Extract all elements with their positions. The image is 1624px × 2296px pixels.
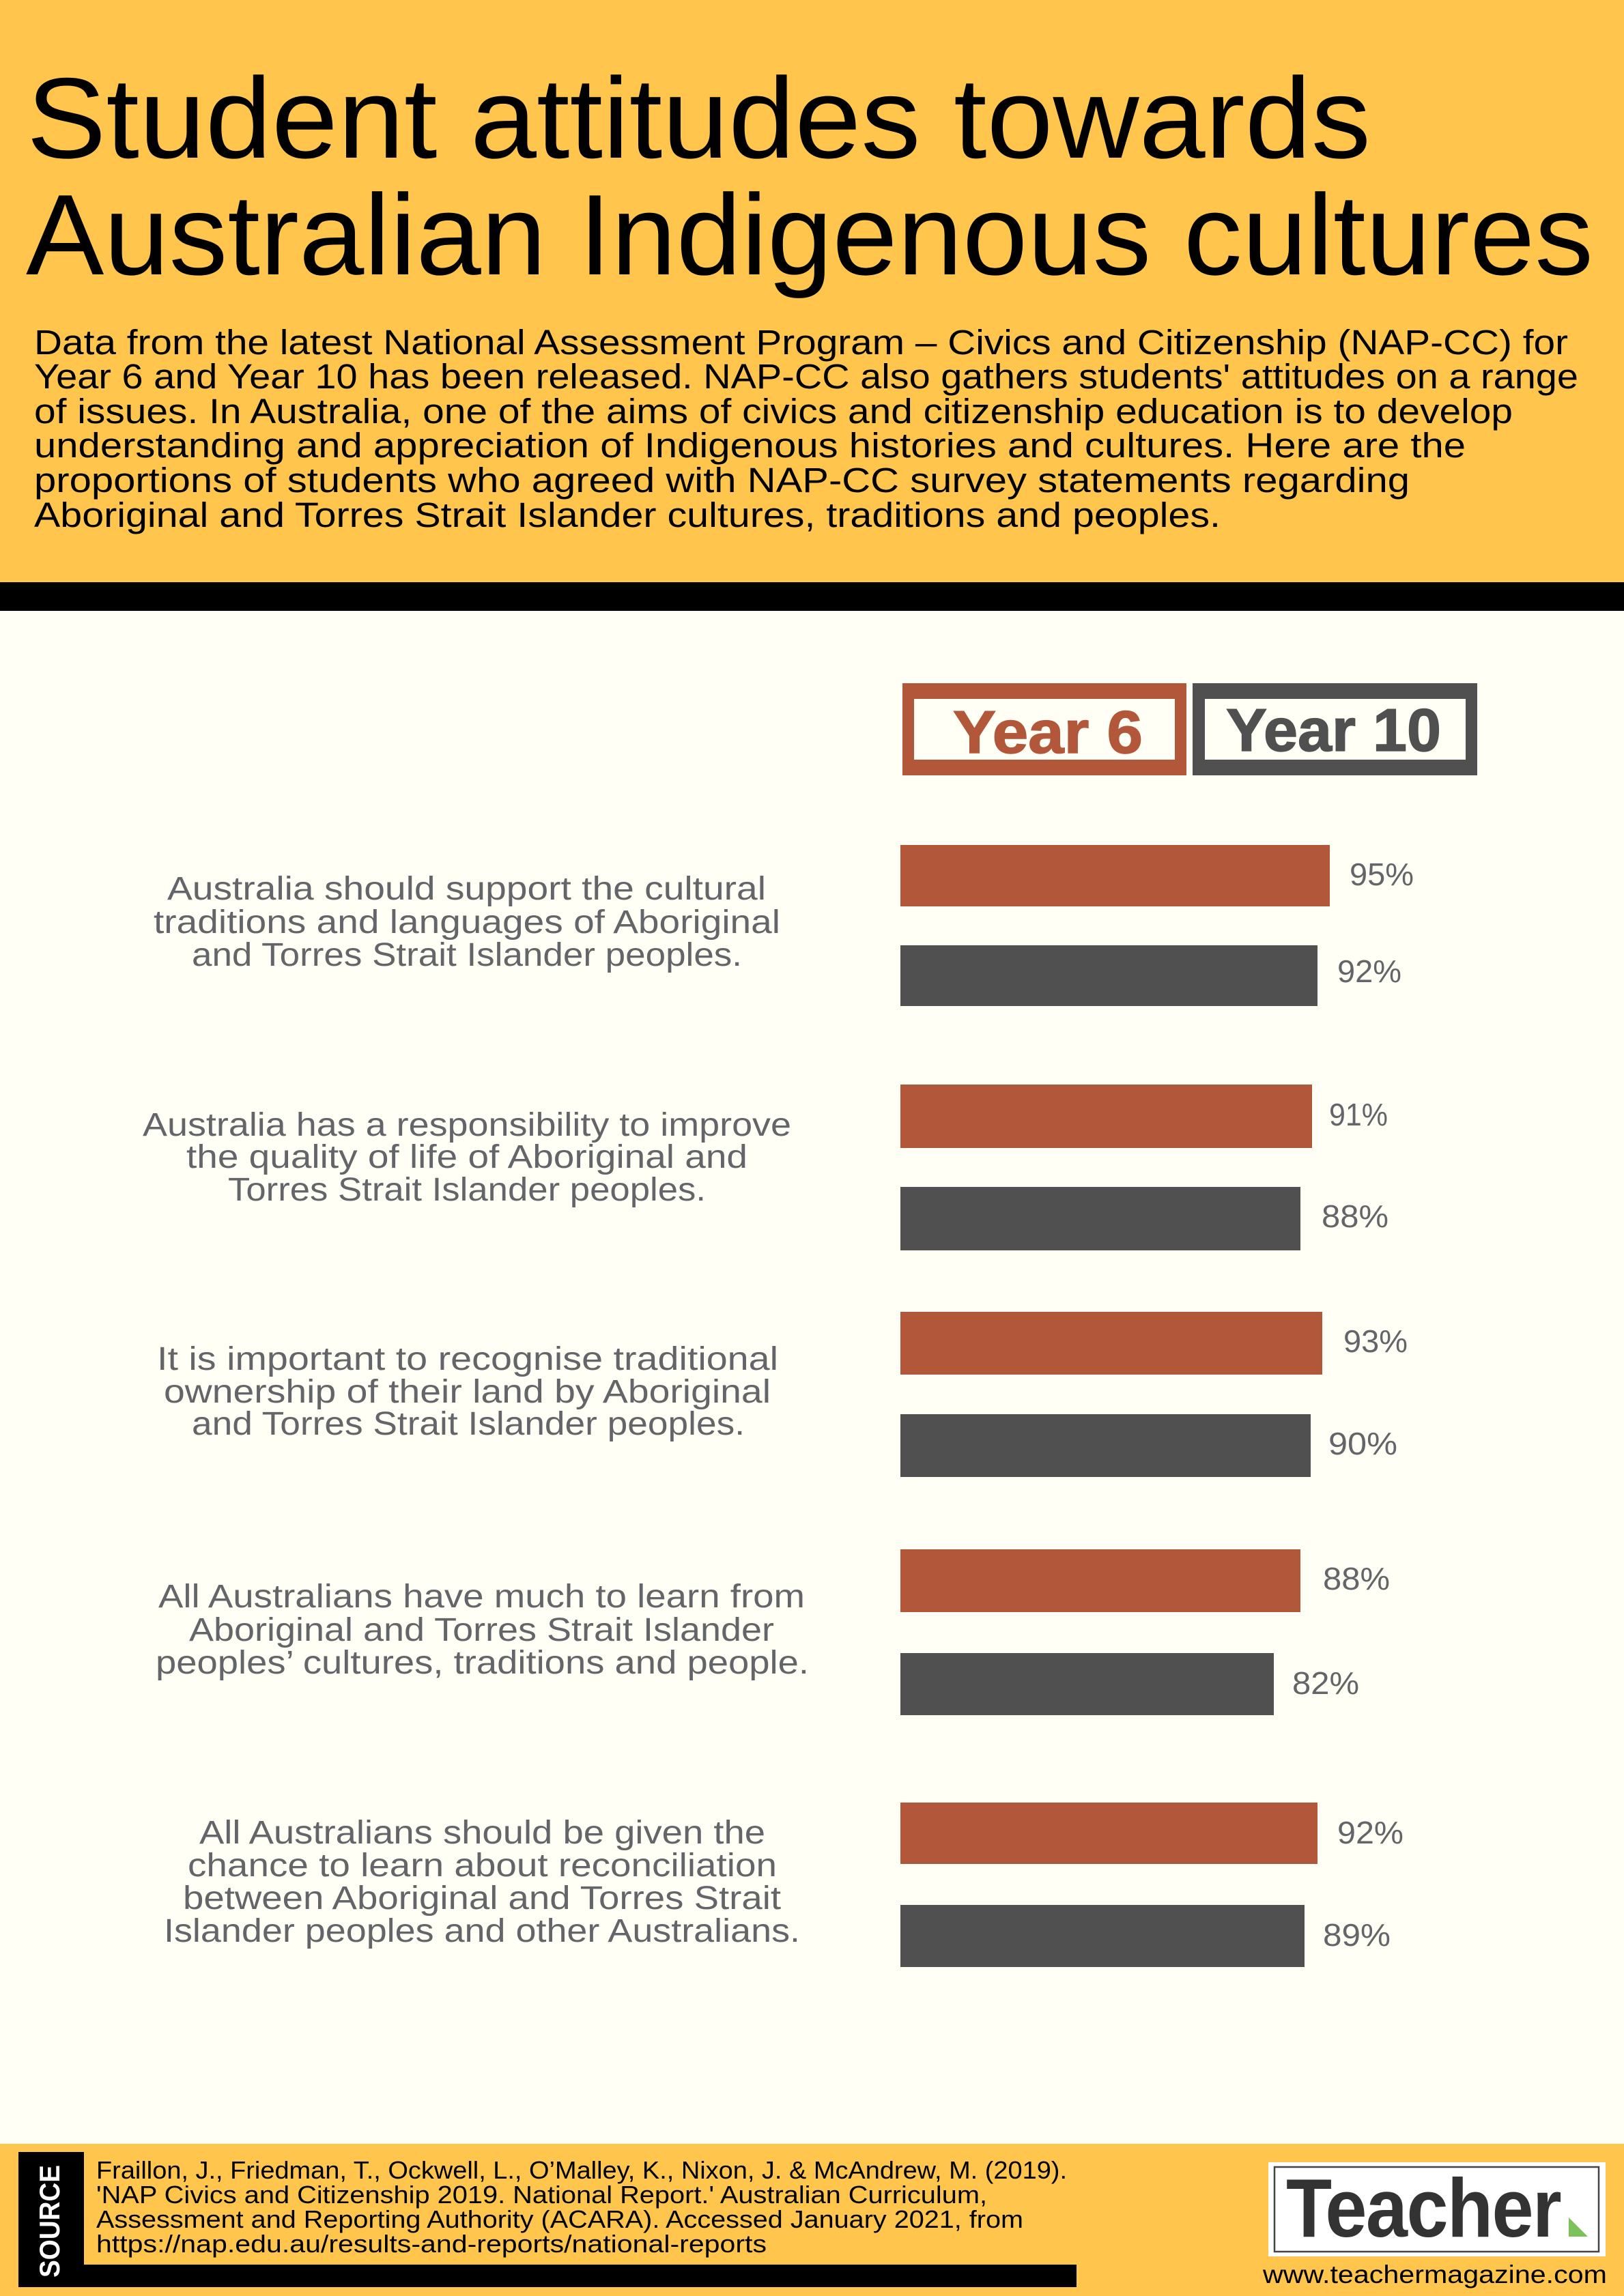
source frame: SOURCE [33, 2165, 66, 2278]
bar chart row 2 [900, 1085, 1388, 1250]
statement 3: ownership of their land by Aboriginal [164, 1374, 771, 1410]
bar chart row 1: 95% [1350, 857, 1414, 892]
bar chart row 4: 82% [1292, 1665, 1359, 1701]
statement 2 [143, 1107, 791, 1208]
intro text block: of issues. In Australia, one of the aims of civics and citizenship education is to develop [34, 392, 1513, 431]
statement 3 [157, 1341, 778, 1442]
intro text block: Data from the latest National Assessment Program – Civics and Citizenship (NAP-CC) for [34, 323, 1568, 362]
statement 4: All Australians have much to learn from [158, 1579, 805, 1615]
bar chart row 2: 91% [1329, 1097, 1388, 1132]
statement 5: between Aboriginal and Torres Strait [183, 1880, 781, 1917]
bar chart row 4 [900, 1549, 1390, 1715]
statement 1: traditions and languages of Aboriginal [154, 904, 780, 941]
bar chart row 5 [900, 1803, 1404, 1967]
statement 2: Torres Strait Islander peoples. [228, 1172, 706, 1208]
intro text block: Year 6 and Year 10 has been released. NAP-CC also gathers students' attitudes on a range [34, 357, 1578, 396]
panel: footer [0, 2144, 1624, 2296]
statement 3: It is important to recognise traditional [157, 1341, 778, 1377]
statement 2: Australia has a responsibility to improve [143, 1107, 791, 1143]
bar chart row 5: 89% [1323, 1917, 1391, 1953]
title: Student attitudes towards [27, 54, 1371, 182]
legend: Year 10 [1193, 683, 1477, 775]
statement 4: peoples’ cultures, traditions and people. [156, 1645, 809, 1681]
bar chart row 1: 92% [1337, 953, 1401, 989]
bar chart row 3: 93% [1343, 1323, 1408, 1359]
statement 4 [156, 1579, 809, 1681]
statement 1: and Torres Strait Islander peoples. [192, 937, 742, 973]
statement 1 [154, 871, 780, 973]
statement 5 [164, 1815, 800, 1949]
statement 5: All Australians should be given the [199, 1815, 765, 1851]
statement 5: chance to learn about reconciliation [188, 1848, 777, 1884]
legend: Year 6 [902, 683, 1186, 775]
statement 3: and Torres Strait Islander peoples. [192, 1406, 745, 1442]
statement 4: Aboriginal and Torres Strait Islander [189, 1612, 774, 1648]
source citation: Assessment and Reporting Authority (ACARA). Accessed January 2021, from [96, 2205, 1023, 2233]
intro text block: Aboriginal and Torres Strait Islander cultures, traditions and peoples. [34, 496, 1221, 534]
source citation: https://nap.edu.au/results-and-reports/national-reports [96, 2230, 767, 2258]
title: Australian Indigenous cultures [26, 171, 1593, 299]
bar chart row 4: 88% [1323, 1561, 1390, 1596]
logo: Teacher: Teacher [1286, 2162, 1561, 2254]
legend: Year 10: Year 10 [1226, 696, 1441, 764]
intro text block [34, 323, 1578, 534]
bar chart row 5: 92% [1337, 1815, 1404, 1850]
website url: www.teachermagazine.com [1262, 2261, 1607, 2288]
panel: header [0, 0, 1624, 611]
source citation [96, 2156, 1067, 2258]
intro text block: understanding and appreciation of Indigenous histories and cultures. Here are the [34, 426, 1466, 465]
bar chart row 1 [900, 845, 1414, 1006]
statement 1: Australia should support the cultural [167, 871, 766, 907]
source citation: 'NAP Civics and Citizenship 2019. National Report.' Australian Curriculum, [96, 2181, 987, 2209]
legend: Year 6: Year 6 [953, 698, 1143, 766]
source frame [18, 2152, 1077, 2287]
bar chart row 3 [900, 1312, 1408, 1477]
bar chart row 2: 88% [1322, 1199, 1388, 1234]
statement 2: the quality of life of Aboriginal and [186, 1139, 747, 1175]
intro text block: proportions of students who agreed with NAP-CC survey statements regarding [34, 461, 1410, 500]
source citation: Fraillon, J., Friedman, T., Ockwell, L., O’Malley, K., Nixon, J. & McAndrew, M. (2019). [96, 2156, 1067, 2184]
bar chart row 3: 90% [1328, 1426, 1397, 1461]
statement 5: Islander peoples and other Australians. [164, 1913, 800, 1949]
title [26, 54, 1593, 299]
